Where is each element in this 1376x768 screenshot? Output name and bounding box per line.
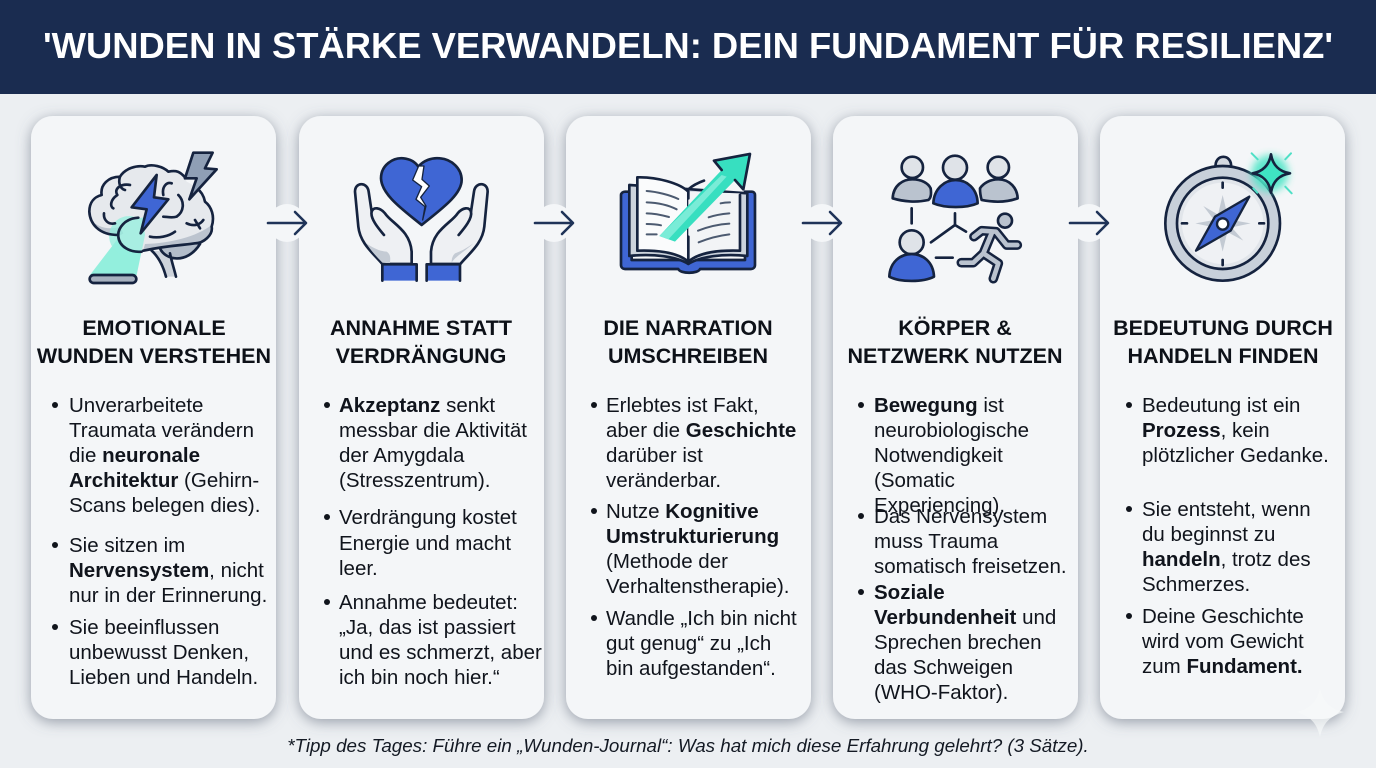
heading: UMSCHREIBEN xyxy=(608,344,768,368)
bullet list: Nutze xyxy=(606,500,665,523)
bullet list: Fundament. xyxy=(1186,655,1303,678)
bullet list: Akzeptanz xyxy=(339,394,440,417)
bullet list: darüber ist xyxy=(606,444,703,467)
icon: open book with rising arrow xyxy=(621,154,755,273)
bullet list: messbar die Aktivität xyxy=(339,419,527,442)
header banner xyxy=(0,0,1376,94)
heading: HANDELN FINDEN xyxy=(1127,344,1319,368)
bullet list: veränderbar. xyxy=(606,469,721,492)
bullet list xyxy=(1126,394,1329,678)
bullet list: Sprechen brechen xyxy=(874,631,1042,654)
bullet list: und es schmerzt, aber xyxy=(339,641,542,664)
bullet list: das Schweigen xyxy=(874,656,1013,679)
bullet list: Nervensystem xyxy=(69,559,209,582)
bullet list: Lieben und Handeln. xyxy=(69,666,258,689)
bullet list: ist xyxy=(978,394,1004,417)
bullet list: Umstrukturierung xyxy=(606,525,779,548)
bullet list: Verhaltenstherapie). xyxy=(606,575,789,598)
icon: hands holding broken heart xyxy=(355,158,488,281)
bullet list: Annahme bedeutet: xyxy=(339,591,518,614)
bullet list: neurobiologische xyxy=(874,419,1029,442)
bullet list: Architektur xyxy=(69,469,178,492)
bullet list: und xyxy=(1016,606,1056,629)
icon: people network and runner xyxy=(889,156,1018,281)
bullet list: (WHO-Faktor). xyxy=(874,681,1008,704)
bullet list: leer. xyxy=(339,557,378,580)
bullet list: Geschichte xyxy=(686,419,796,442)
arrow 1 xyxy=(268,204,306,242)
bullet list: Sie entsteht, wenn xyxy=(1142,498,1311,521)
bullet list: nur in der Erinnerung. xyxy=(69,584,267,607)
bullet list: muss Trauma xyxy=(874,530,999,553)
bullet list: Verdrängung kostet xyxy=(339,506,517,529)
bullet list: Bedeutung ist ein xyxy=(1142,394,1300,417)
heading: ANNAHME STATT xyxy=(330,316,512,340)
heading: VERDRÄNGUNG xyxy=(336,344,506,368)
bullet list: die xyxy=(69,444,102,467)
bullet list: „Ja, das ist passiert xyxy=(339,616,516,639)
bullet list xyxy=(324,394,542,689)
bullet list: Unverarbeitete xyxy=(69,394,203,417)
bullet list: Notwendigkeit xyxy=(874,444,1003,467)
watermark sparkle xyxy=(1296,688,1344,737)
bullet list: Traumata verändern xyxy=(69,419,254,442)
bullet list: (Stresszentrum). xyxy=(339,469,490,492)
panel: Die Narration umschreiben xyxy=(566,116,811,719)
bullet list: handeln xyxy=(1142,548,1221,571)
bullet list: Verbundenheit xyxy=(874,606,1017,629)
bullet list: , kein xyxy=(1221,419,1270,442)
bullet list: unbewusst Denken, xyxy=(69,641,249,664)
bullet list: senkt xyxy=(440,394,495,417)
panel: Annahme statt Verdrängung xyxy=(299,116,544,719)
arrow 4 xyxy=(1070,204,1108,242)
bullet list xyxy=(591,394,797,680)
bullet list: bin aufgestanden“. xyxy=(606,657,776,680)
bullet list: (Methode der xyxy=(606,550,728,573)
bullet list: ich bin noch hier.“ xyxy=(339,666,500,689)
title: 'WUNDEN IN STÄRKE VERWANDELN: DEIN FUNDAMENT FÜR RESILIENZ' xyxy=(43,25,1333,66)
heading: EMOTIONALE xyxy=(82,316,226,340)
heading: NETZWERK NUTZEN xyxy=(848,344,1062,368)
bullet list: neuronale xyxy=(102,444,200,467)
bullet list: Sie sitzen im xyxy=(69,534,185,557)
bullet list: Wandle „Ich bin nicht xyxy=(606,607,797,630)
bullet list: Das Nervensystem xyxy=(874,505,1047,528)
bullet list: Deine Geschichte xyxy=(1142,605,1304,628)
heading: DIE NARRATION xyxy=(603,316,773,340)
bullet list: Erlebtes ist Fakt, xyxy=(606,394,759,417)
bullet list: Kognitive xyxy=(665,500,759,523)
bullet list: Energie und macht xyxy=(339,532,511,555)
heading: WUNDEN VERSTEHEN xyxy=(37,344,271,368)
arrow 2 xyxy=(535,204,573,242)
bullet list: Scans belegen dies). xyxy=(69,494,260,517)
bullet list: gut genug“ zu „Ich xyxy=(606,632,771,655)
bullet list: zum xyxy=(1142,655,1186,678)
arrow 3 xyxy=(803,204,841,242)
bullet list: Schmerzes. xyxy=(1142,573,1250,596)
icon: compass with sparkle xyxy=(1165,153,1292,281)
icon: brain with lightning xyxy=(89,153,217,283)
panel: emotionale Wunden verstehen xyxy=(31,116,276,719)
heading: BEDEUTUNG DURCH xyxy=(1113,316,1333,340)
footer tip: *Tipp des Tages: Führe ein „Wunden-Journal“: Was hat mich diese Erfahrung gelehrt? (3 Sätze). xyxy=(287,735,1089,756)
bullet list: , nicht xyxy=(209,559,264,582)
bullet list: (Somatic xyxy=(874,469,955,492)
bullet list xyxy=(858,394,1067,704)
bullet list: aber die xyxy=(606,419,686,442)
bullet list: du beginnst zu xyxy=(1142,523,1275,546)
bullet list: (Gehirn- xyxy=(178,469,259,492)
bullet list: Bewegung xyxy=(874,394,978,417)
heading: KÖRPER & xyxy=(898,315,1012,340)
panel: Körper & Netzwerk nutzen xyxy=(833,116,1078,719)
bullet list: somatisch freisetzen. xyxy=(874,555,1067,578)
bullet list xyxy=(52,394,267,689)
bullet list: Sie beeinflussen xyxy=(69,616,219,639)
bullet list: Soziale xyxy=(874,581,945,604)
bullet list: wird vom Gewicht xyxy=(1141,630,1304,653)
bullet list: plötzlicher Gedanke. xyxy=(1142,444,1329,467)
panel: Bedeutung durch Handeln finden xyxy=(1100,116,1345,719)
bullet list: der Amygdala xyxy=(339,444,465,467)
bullet list: Prozess xyxy=(1142,419,1221,442)
bullet list: , trotz des xyxy=(1221,548,1311,571)
bullet list: Experiencing). xyxy=(874,494,1005,517)
